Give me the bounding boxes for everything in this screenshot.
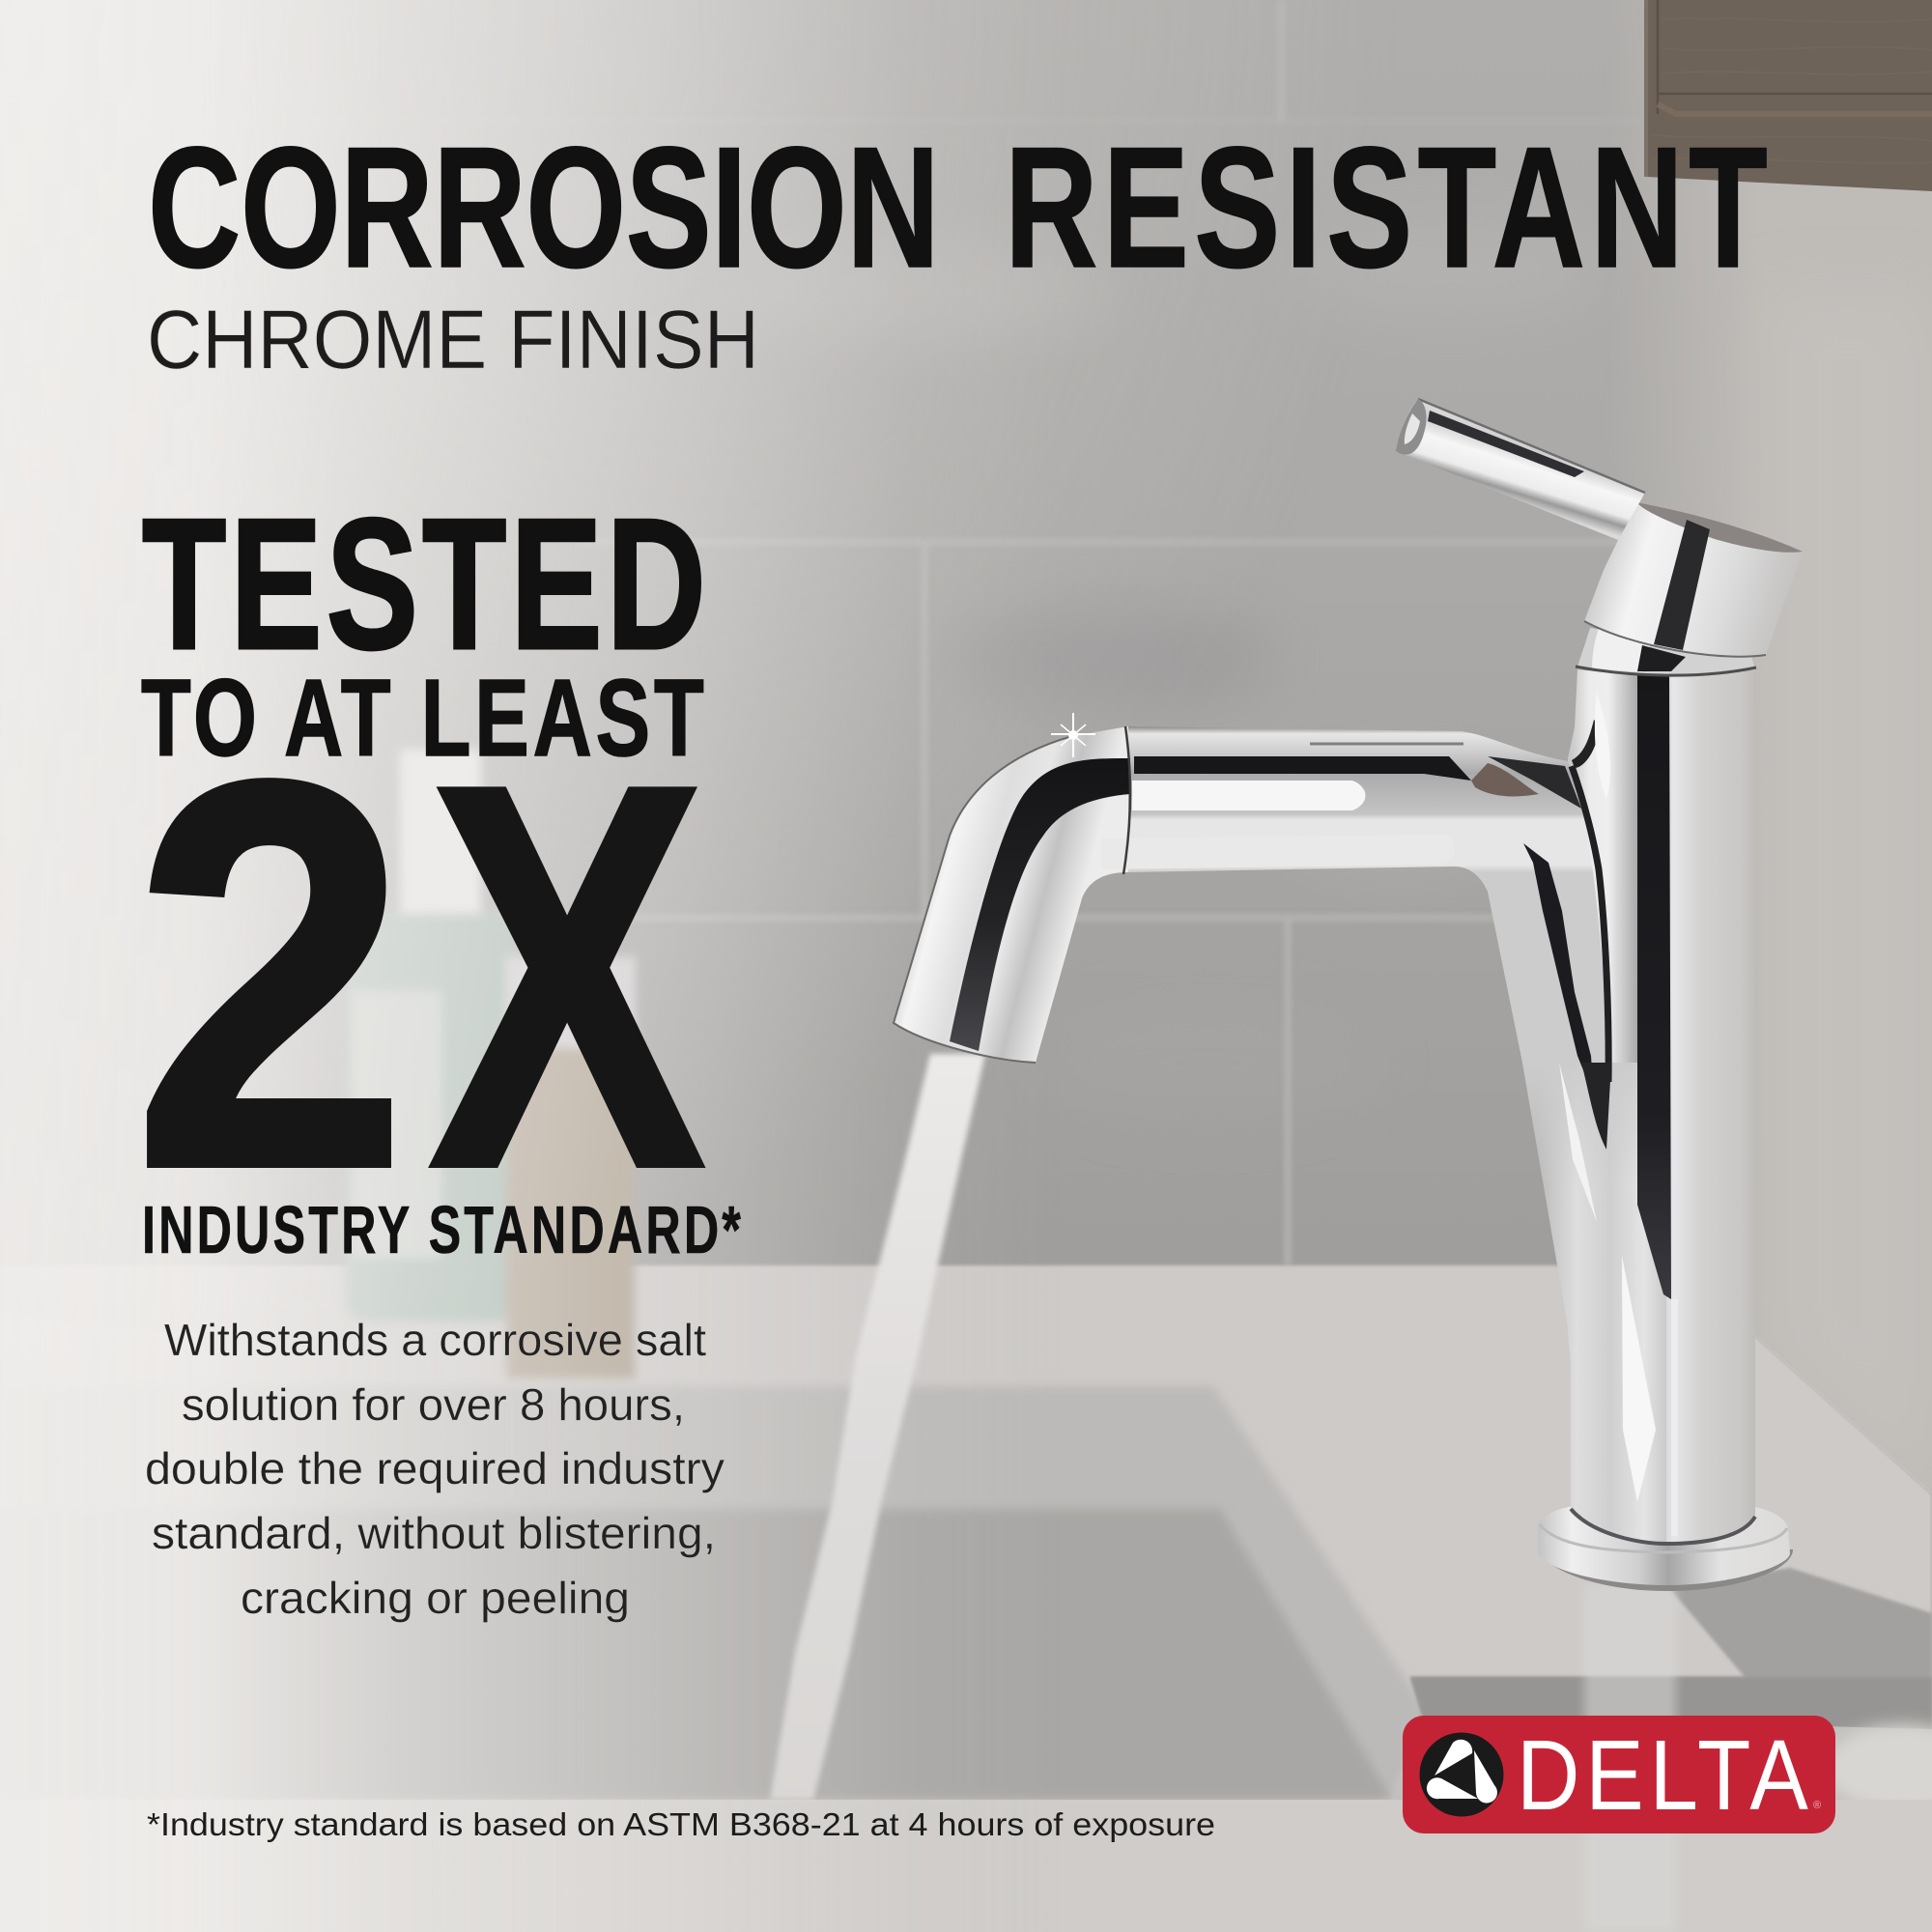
icon: Delta triangle mark <box>1420 1733 1503 1816</box>
handle <box>1584 502 1803 657</box>
heading: corrosion resistant: CORROSION <box>148 112 940 303</box>
to at least: TO AT LEAST <box>141 658 704 780</box>
spout and slanted riser <box>1128 726 1610 1101</box>
lower body <box>1522 1063 1666 1544</box>
body copy: Withstands a corrosive salt <box>164 1315 706 1365</box>
faucet reflection <box>1584 1584 1676 1932</box>
spout highlights <box>1132 781 1366 810</box>
amber bottle <box>506 956 636 1048</box>
counter lower area behind logo <box>1392 1716 1932 1800</box>
base ring <box>1538 1500 1793 1591</box>
teal bottle cap <box>400 750 481 914</box>
spout elbow <box>894 726 1128 1063</box>
heading: corrosion resistant <box>148 112 1768 303</box>
sparkle <box>1051 713 1095 757</box>
big number 2X: 2 <box>133 669 408 1281</box>
big number 2X: X <box>430 672 706 1280</box>
tested: TESTED <box>142 479 706 688</box>
sink walls <box>0 1386 1430 1800</box>
riser reflections <box>1572 766 1608 1082</box>
spout reflections <box>1134 756 1471 781</box>
bottom edge <box>0 1800 1932 1932</box>
industry standard: INDUSTRY STANDARD* <box>142 1192 741 1267</box>
column bottom collar <box>1571 1509 1755 1544</box>
footnote: *Industry standard is based on ASTM B368-21 at 4 hours of exposure <box>147 1806 1215 1842</box>
counter and sink <box>0 1265 1932 1932</box>
big number 2X <box>133 669 706 1281</box>
right wall <box>1604 0 1932 1494</box>
body copy: standard, without blistering, <box>152 1508 716 1558</box>
faucet shadow on counter <box>1410 1568 1932 1739</box>
faucet column <box>1568 668 1755 1544</box>
sink basin <box>0 1509 1392 1800</box>
neck <box>1577 628 1754 675</box>
claim block <box>133 479 741 1281</box>
body copy <box>145 1315 724 1623</box>
faucet <box>894 399 1803 1591</box>
cabinet <box>1646 0 1932 191</box>
slot and ring seam <box>1310 742 1463 746</box>
body copy: cracking or peeling <box>241 1573 630 1623</box>
registered mark: ® <box>1813 1800 1821 1811</box>
water stream <box>770 1054 985 1800</box>
body copy: solution for over 8 hours, <box>182 1379 685 1430</box>
logo: Delta <box>1403 1716 1835 1833</box>
teal bottle body <box>345 913 516 1321</box>
tile grout lines <box>0 0 1657 1265</box>
body copy: double the required industry <box>145 1443 724 1493</box>
lever <box>1396 399 1645 540</box>
column dark reflection <box>1637 669 1671 1299</box>
wordmark: DELTA <box>1517 1719 1808 1831</box>
subheading: chrome finish: CHROME FINISH <box>147 294 759 386</box>
tile wall veining <box>724 222 1604 1121</box>
heading: corrosion resistant: RESISTANT <box>1005 112 1768 303</box>
bottles <box>345 750 636 1378</box>
